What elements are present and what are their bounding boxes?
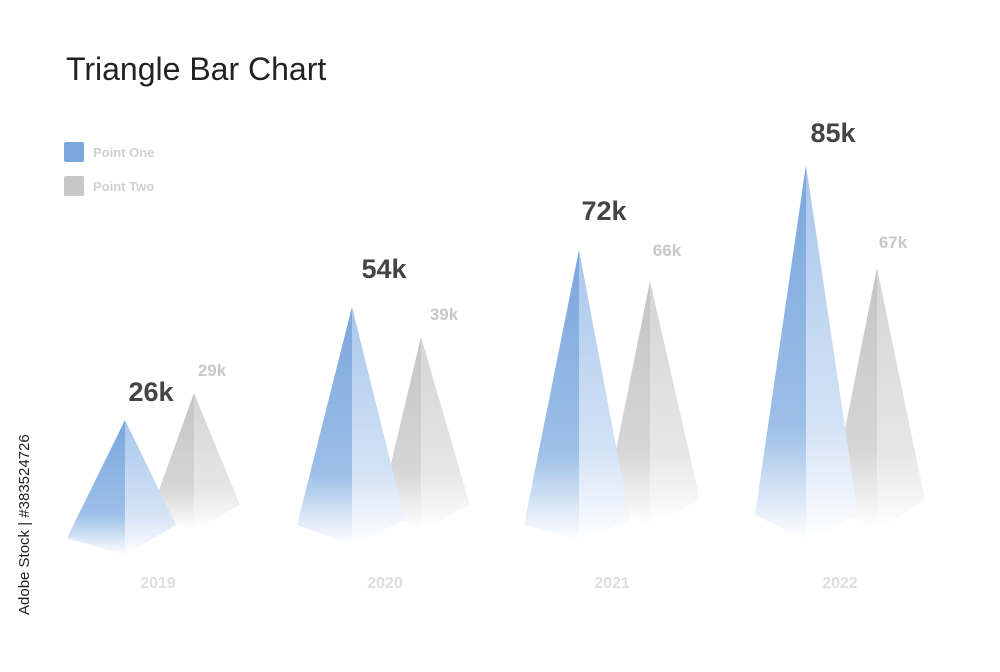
group 2022: 2022 (822, 575, 858, 592)
group 2019: 29k (198, 361, 227, 380)
group 2021: 72k (581, 196, 628, 226)
group 2022: 67k (879, 233, 908, 252)
group 2021: 2021 (594, 575, 630, 592)
group 2021: 66k (653, 241, 682, 260)
legend: Point One (93, 145, 154, 160)
group 2021 (524, 196, 700, 592)
group 2022 (755, 118, 925, 592)
title: Triangle Bar Chart (66, 51, 326, 87)
group 2020: 39k (430, 305, 459, 324)
side text: Adobe Stock | #383524726 (16, 434, 33, 615)
group 2019 (67, 361, 240, 592)
group 2022: 85k (810, 118, 857, 148)
group 2020: 2020 (367, 575, 403, 592)
group 2019: 26k (128, 377, 175, 407)
legend: Point Two (93, 179, 154, 194)
group 2019: 2019 (140, 575, 176, 592)
group 2020: 54k (361, 254, 408, 284)
legend (64, 142, 154, 196)
group 2020 (297, 254, 470, 592)
